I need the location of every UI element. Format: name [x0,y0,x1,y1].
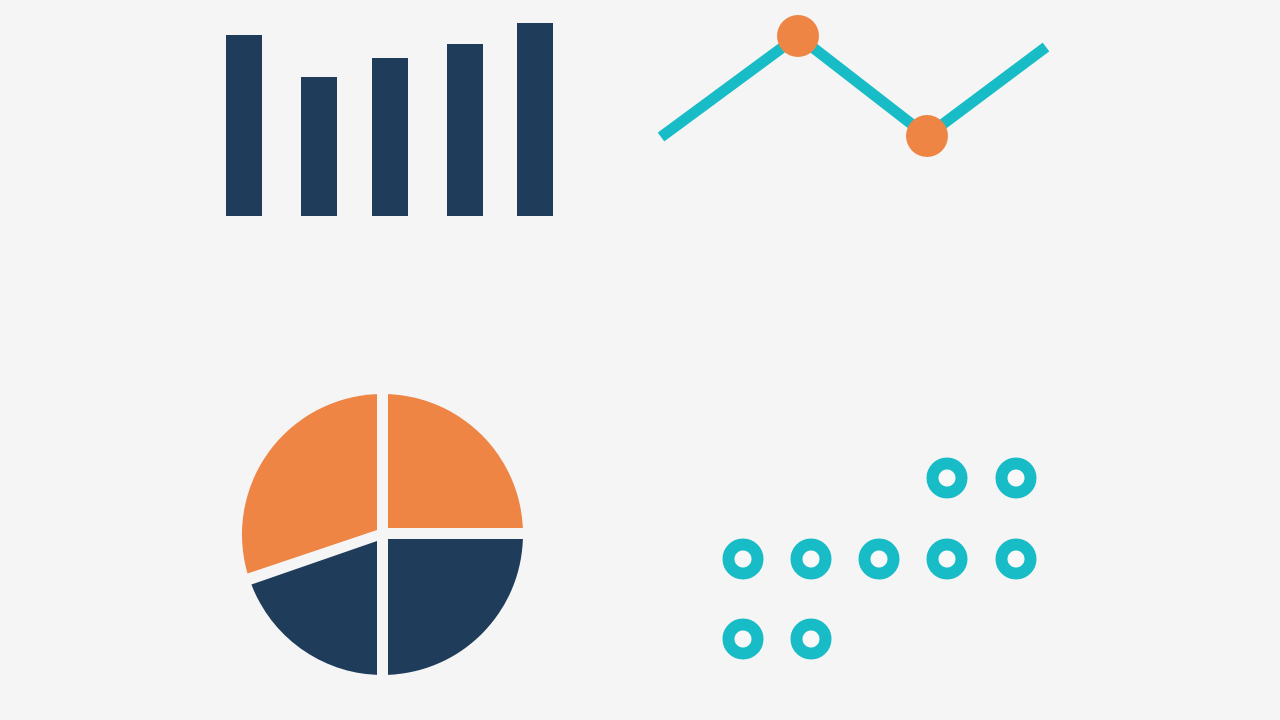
line chart [661,15,1046,157]
dot grid [728,464,1030,654]
bar chart [226,23,553,216]
pie chart [242,394,523,675]
